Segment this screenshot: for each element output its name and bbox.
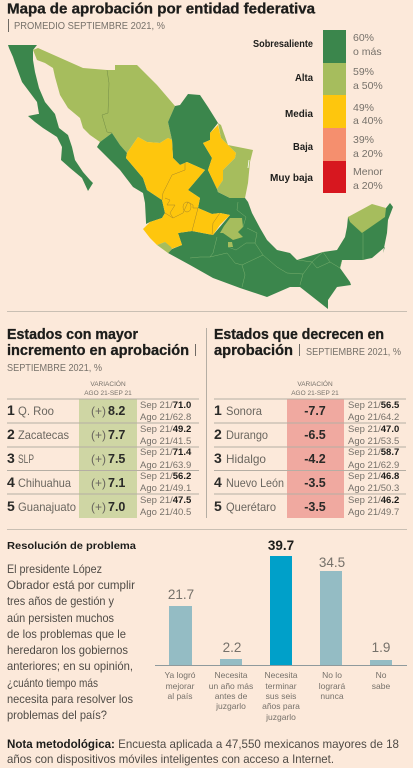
panel heading: SEPTIEMBRE 2021, % bbox=[7, 363, 102, 374]
question text: ¿cuánto tiempo más bbox=[7, 676, 98, 690]
row 4: Ago 21/49.1 bbox=[140, 483, 191, 494]
state: Mexico City bbox=[228, 242, 233, 247]
title: Mapa de aprobación por entidad federativa bbox=[7, 2, 316, 18]
row 5: Guanajuato bbox=[18, 500, 76, 514]
bar: ya logró: Ya logró bbox=[164, 670, 196, 680]
question text: aún persisten muchos bbox=[7, 611, 114, 625]
row 5 bbox=[7, 495, 192, 518]
legend: baja: Baja bbox=[293, 141, 313, 153]
methodological note bbox=[7, 737, 399, 766]
row 1: Q. Roo bbox=[18, 404, 54, 418]
panel heading bbox=[214, 327, 401, 359]
row 4: 4 bbox=[214, 474, 222, 490]
row 3: Hidalgo bbox=[226, 452, 266, 466]
column header bbox=[84, 379, 132, 397]
bar: no sabe: 1.9 bbox=[372, 640, 390, 655]
row 5: Ago 21/49.7 bbox=[348, 507, 399, 518]
row 2: 2 bbox=[7, 426, 15, 442]
bar: un año más: juzgarlo bbox=[215, 701, 246, 711]
row 4: Nuevo León bbox=[226, 476, 284, 490]
row 3: Sep 21/58.7 bbox=[348, 447, 399, 458]
methodological note: años con dispositivos móviles inteligentes con acceso a Internet. bbox=[7, 752, 334, 766]
row 4: Ago 21/50.3 bbox=[348, 483, 399, 494]
methodological note: Nota metodológica: Encuesta aplicada a 47,550 mexicanos mayores de 18 bbox=[7, 737, 399, 751]
row 3: 3 bbox=[214, 450, 222, 466]
panel heading bbox=[7, 327, 196, 374]
row 2: 7.7 bbox=[108, 428, 125, 442]
row 1: 1 bbox=[214, 402, 222, 418]
bar: terminar sexenio: 39.7 bbox=[268, 538, 294, 553]
state: Coahuila, San Luis Potosi and southern states bbox=[168, 94, 393, 309]
row 3: (+) bbox=[91, 452, 106, 466]
map subtitle: PROMEDIO SEPTIEMBRE 2021, % bbox=[14, 21, 165, 32]
legend: sobresaliente bbox=[253, 30, 382, 63]
legend: baja: 39% bbox=[353, 134, 374, 146]
state: Tamaulipas bbox=[217, 123, 253, 198]
column header: VARIACIÓN bbox=[297, 379, 333, 388]
bar: no lo logrará: nunca bbox=[320, 691, 344, 701]
state borders in yellow area bbox=[162, 163, 220, 235]
bar: no lo logrará bbox=[319, 555, 345, 701]
row 5: 7.0 bbox=[108, 500, 125, 514]
bar: terminar sexenio: Necesita bbox=[264, 670, 298, 680]
bar: no lo logrará: No lo bbox=[322, 670, 342, 680]
bar: terminar sexenio: juzgarlo bbox=[265, 712, 296, 722]
row 2: Ago 21/53.5 bbox=[348, 436, 399, 447]
row 1: Sep 21/56.5 bbox=[348, 400, 400, 411]
panel heading: SEPTIEMBRE 2021, % bbox=[306, 347, 401, 358]
state borders in north bbox=[102, 70, 112, 133]
row 5: 5 bbox=[214, 498, 222, 514]
row 5: Querétaro bbox=[226, 500, 276, 514]
bar: no lo logrará: 34.5 bbox=[319, 555, 345, 570]
legend: baja bbox=[293, 128, 383, 161]
row 4 bbox=[7, 471, 191, 494]
row 3: Ago 21/62.9 bbox=[348, 460, 399, 471]
row 3: 3 bbox=[7, 450, 15, 466]
legend: alta: Alta bbox=[295, 72, 313, 84]
map of Mexico bbox=[8, 45, 393, 309]
bar: un año más: antes de bbox=[215, 691, 248, 701]
state: Chihuahua bbox=[102, 65, 175, 153]
row 5: Sep 21/46.2 bbox=[348, 495, 399, 506]
question text: tres años de gestión y bbox=[7, 594, 114, 608]
map legend bbox=[253, 30, 383, 193]
row 4 bbox=[214, 471, 399, 494]
bar: ya logró: 21.7 bbox=[168, 587, 194, 602]
bar: ya logró: al país bbox=[167, 691, 193, 701]
row 3: Sep 21/71.4 bbox=[140, 447, 192, 458]
state borders in south bbox=[190, 202, 363, 287]
bar: terminar sexenio: años para bbox=[262, 701, 300, 711]
bar: un año más: 2.2 bbox=[223, 640, 241, 655]
row 2: 2 bbox=[214, 426, 222, 442]
lagoon on gulf coast bbox=[248, 160, 249, 168]
row 1: Ago 21/62.8 bbox=[140, 412, 191, 423]
bar: ya logró bbox=[164, 587, 196, 701]
panel: mayor incremento bbox=[7, 327, 199, 518]
row 3: -4.2 bbox=[304, 452, 326, 466]
row 1: Sep 21/71.0 bbox=[140, 400, 191, 411]
row 2 bbox=[214, 424, 399, 447]
bar: no sabe: sabe bbox=[372, 681, 390, 691]
panel: decrecen bbox=[214, 327, 406, 518]
row 5: -3.5 bbox=[304, 500, 326, 514]
row 5: Ago 21/40.5 bbox=[140, 507, 191, 518]
state: Colima bbox=[157, 242, 172, 253]
bar: un año más bbox=[209, 640, 253, 711]
bar: ya logró: mejorar bbox=[166, 681, 195, 691]
row 4: -3.5 bbox=[304, 476, 326, 490]
legend: media: 49% bbox=[353, 102, 374, 114]
legend: muy baja: a 20% bbox=[353, 180, 383, 192]
legend: alta bbox=[295, 63, 383, 95]
row 2: Durango bbox=[226, 428, 268, 442]
column header: VARIACIÓN bbox=[90, 379, 126, 388]
bar: no lo logrará: logrará bbox=[319, 681, 345, 691]
bar chart bbox=[155, 538, 407, 722]
states in media range bbox=[126, 137, 230, 249]
row 4: Sep 21/46.8 bbox=[348, 471, 399, 482]
row 3 bbox=[7, 447, 192, 471]
state: Sinaloa and Nayarit bbox=[97, 133, 165, 224]
state: Sonora bbox=[33, 48, 112, 142]
row 1: 8.2 bbox=[108, 404, 125, 418]
row 2: Zacatecas bbox=[18, 428, 69, 442]
row 2: -6.5 bbox=[304, 428, 326, 442]
row 1: 1 bbox=[7, 402, 15, 418]
row 5: Sep 21/47.5 bbox=[140, 495, 192, 506]
row 2: Sep 21/49.2 bbox=[140, 424, 191, 435]
bar: terminar sexenio: sus seis bbox=[266, 691, 296, 701]
row 5: (+) bbox=[91, 500, 106, 514]
question text: necesita para resolver los bbox=[7, 692, 133, 706]
bar: un año más: Necesita bbox=[214, 670, 248, 680]
question text: heredaron los gobiernos bbox=[7, 643, 128, 657]
row 4: 4 bbox=[7, 474, 15, 490]
row 1: Ago 21/64.2 bbox=[348, 412, 399, 423]
legend: media: a 40% bbox=[353, 115, 383, 127]
legend: alta: a 50% bbox=[353, 80, 383, 92]
state: Hidalgo bbox=[220, 218, 243, 240]
bar: terminar sexenio bbox=[262, 538, 300, 722]
column header: AGO 21-SEP 21 bbox=[291, 390, 339, 397]
question text: anteriores; en su opinión, bbox=[7, 659, 133, 673]
row 4: Chihuahua bbox=[18, 476, 71, 490]
variation highlight column bbox=[287, 399, 344, 518]
row 4: (+) bbox=[91, 476, 106, 490]
column header bbox=[291, 379, 339, 397]
row 3 bbox=[214, 447, 399, 471]
row 4: 7.1 bbox=[108, 476, 125, 490]
section heading: resolución de problema: Resolución de problema bbox=[7, 540, 136, 552]
row 3: SLP bbox=[18, 452, 34, 466]
legend: media: Media bbox=[285, 108, 313, 120]
row 3: 7.5 bbox=[108, 452, 125, 466]
question text: de los problemas que le bbox=[7, 627, 126, 641]
legend: baja: a 20% bbox=[353, 148, 383, 160]
variation highlight column bbox=[79, 399, 137, 518]
question text: problemas del país? bbox=[7, 708, 107, 722]
row 1: (+) bbox=[91, 404, 106, 418]
row 2: Sep 21/47.0 bbox=[348, 424, 399, 435]
row 1 bbox=[7, 400, 191, 423]
question text: Obrador está por cumplir bbox=[7, 578, 135, 592]
row 1: Sonora bbox=[226, 404, 262, 418]
row 3: Ago 21/63.9 bbox=[140, 460, 191, 471]
row 5 bbox=[214, 495, 399, 518]
row 4: Sep 21/56.2 bbox=[140, 471, 191, 482]
row 1 bbox=[214, 400, 400, 423]
row 5: 5 bbox=[7, 498, 15, 514]
panel heading: aprobación bbox=[214, 343, 293, 359]
legend: sobresaliente: o más bbox=[353, 46, 382, 58]
bar: no sabe bbox=[370, 640, 392, 691]
legend: sobresaliente: 60% bbox=[353, 32, 374, 44]
bar: un año más: un año más bbox=[209, 681, 253, 691]
row 1: -7.7 bbox=[304, 404, 326, 418]
row 2 bbox=[7, 424, 191, 447]
legend: muy baja: Muy baja bbox=[270, 172, 313, 184]
bar: terminar sexenio: terminar bbox=[265, 681, 297, 691]
question text bbox=[7, 562, 135, 722]
legend: muy baja bbox=[270, 161, 383, 193]
state: Yucatan bbox=[348, 204, 386, 233]
state: Baja California bbox=[8, 45, 55, 114]
bar: no sabe: No bbox=[376, 670, 387, 680]
panel heading: Estados que decrecen en bbox=[214, 327, 384, 343]
panel heading: Estados con mayor bbox=[7, 327, 138, 343]
legend: muy baja: Menor bbox=[353, 166, 383, 178]
legend: alta: 59% bbox=[353, 66, 374, 78]
legend: media bbox=[285, 95, 383, 128]
row 2: Ago 21/41.5 bbox=[140, 436, 191, 447]
state: Baja California Sur bbox=[28, 114, 93, 191]
legend: sobresaliente: Sobresaliente bbox=[253, 38, 313, 50]
panel heading: incremento en aprobación bbox=[7, 343, 189, 359]
question text: El presidente López bbox=[7, 562, 102, 576]
state: Nuevo Leon bbox=[203, 125, 236, 189]
row 2: (+) bbox=[91, 428, 106, 442]
column header: AGO 21-SEP 21 bbox=[84, 390, 132, 397]
